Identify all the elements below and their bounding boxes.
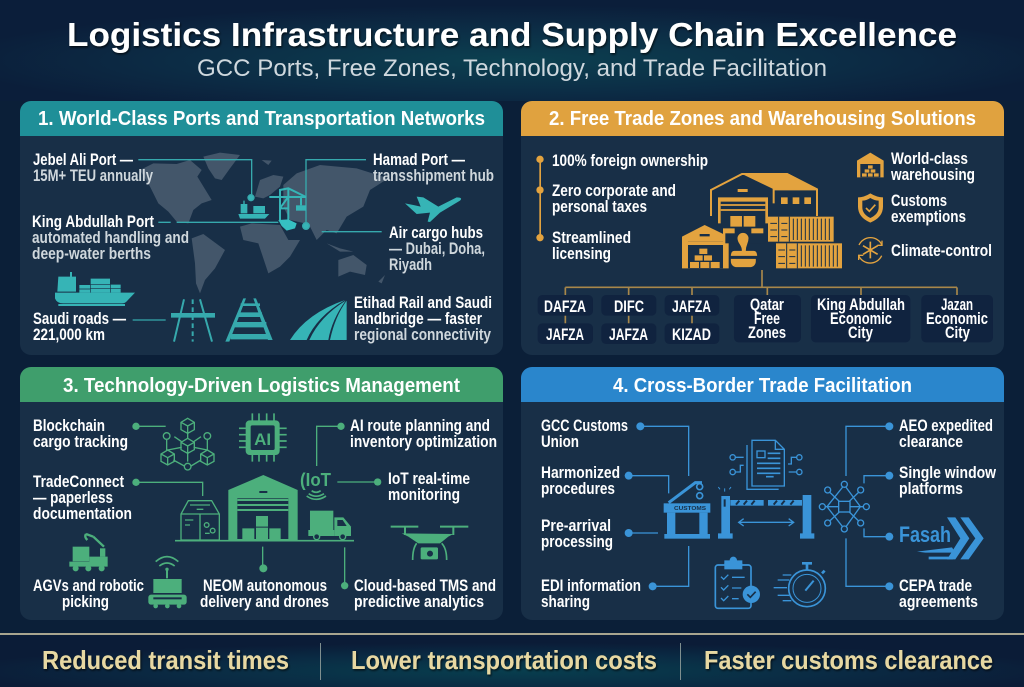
icon: central warehouse scene <box>175 475 354 541</box>
text: CEPA trade agreements <box>899 577 978 611</box>
text: TradeConnect <box>33 473 132 523</box>
text: AI route planning: AI route planning and <box>350 417 490 435</box>
icon: crate with documents <box>181 501 219 540</box>
text: Pre-arrival processing: processing <box>541 533 613 551</box>
text: Air cargo hubs <box>389 224 485 274</box>
icon: IoT signal: (IoT <box>300 470 331 490</box>
text: Cloud TMS: Cloud-based TMS and <box>354 577 496 595</box>
text: EDI information sharing <box>541 577 641 611</box>
icon: IoT signal <box>300 470 331 499</box>
bullet text: Zero corporate and <box>552 182 676 200</box>
text: Hamad Port <box>373 151 494 185</box>
text: TradeConnect: documentation <box>33 505 132 523</box>
text: Harmonized procedures <box>541 464 620 498</box>
text: Air cargo hubs: — Dubai, Doha, <box>389 240 485 258</box>
text: Jebel Ali Port: Jebel Ali Port — <box>33 151 133 169</box>
icon: AI chip <box>239 413 287 462</box>
text: Hamad Port: transshipment hub <box>373 167 494 185</box>
text: King Abdullah Port: automated handling and <box>32 229 189 247</box>
text: warehouse features: exemptions <box>891 208 966 226</box>
text: warehouse features: warehousing <box>890 166 975 184</box>
text: warehouse features: Customs <box>891 192 947 210</box>
text: IoT monitoring: IoT real-time <box>388 470 470 488</box>
text: NEOM: delivery and drones <box>200 593 329 611</box>
text: AEO expedited clearance: clearance <box>899 433 963 451</box>
zone tag names <box>544 296 988 344</box>
panel: technology logistics <box>20 367 503 620</box>
world map <box>140 153 388 293</box>
zone tag names: Qatar <box>750 296 784 314</box>
text: King Abdullah Port <box>32 213 189 263</box>
benefit: reduced transit times: Reduced transit times <box>42 645 289 675</box>
text: Cloud TMS <box>354 577 496 611</box>
text: blockchain <box>33 417 128 451</box>
text: TradeConnect: — paperless <box>33 489 113 507</box>
icon: robotic AGV <box>69 534 108 571</box>
icon: climate control <box>859 238 882 263</box>
icon: drone <box>391 527 468 560</box>
text: GCC Customs Union: GCC Customs <box>541 417 628 435</box>
text: GCC Customs Union <box>541 417 628 451</box>
panel 2 header: 2. Free Trade Zones and Warehousing Solutions <box>549 108 976 130</box>
icon: clipboard checklist <box>715 557 760 608</box>
icon: warehousing <box>857 153 884 177</box>
icon: stopwatch <box>774 563 825 607</box>
panel 4 header: 4. Cross-Border Trade Facilitation <box>613 375 912 397</box>
icon: port crane and ship <box>238 188 306 231</box>
text: AI route planning: inventory optimization <box>350 433 497 451</box>
icon: landbridge road <box>290 300 347 340</box>
text: EDI information sharing: EDI information <box>541 577 641 595</box>
zone tag names: City <box>848 324 874 342</box>
bullet text: Streamlined <box>552 229 631 247</box>
footer benefits bar <box>0 633 1024 680</box>
text: Etihad Rail: Etihad Rail and Saudi <box>354 294 492 312</box>
text: King Abdullah Port: King Abdullah Port <box>32 213 154 231</box>
panel 3 header <box>20 367 503 402</box>
zone tag names: Free <box>754 310 780 328</box>
zone tag names: DAFZA <box>544 298 586 316</box>
text: Single window platforms: Single window <box>899 464 996 482</box>
panel: cross-border trade <box>521 367 1004 620</box>
zone tag names: Jazan <box>941 296 973 314</box>
zone tag names: Economic <box>830 310 892 328</box>
text: Saudi roads: 221,000 km <box>33 326 105 344</box>
icon: customs building with crane: CUSTOMS <box>674 506 706 512</box>
text: blockchain: Blockchain <box>33 417 105 435</box>
zone tag boxes <box>538 295 993 344</box>
bullet text: licensing <box>552 245 611 263</box>
text: AGVs: picking <box>62 593 109 611</box>
bullet text: 100% foreign ownership <box>552 152 708 170</box>
text: AGVs: AGVs and robotic <box>33 577 144 595</box>
text: Jebel Ali Port: 15M+ TEU annually <box>33 167 154 185</box>
zone tag names: KIZAD <box>672 326 711 344</box>
text: Pre-arrival processing <box>541 517 613 551</box>
icon: delivery truck <box>308 511 351 536</box>
text: warehouse features: World-class <box>891 150 968 168</box>
text: Etihad Rail <box>354 294 492 344</box>
icon: digital document <box>730 440 802 489</box>
benefit: lower transportation costs: Lower transportation costs <box>351 645 657 675</box>
text: Air cargo hubs: Air cargo hubs <box>389 224 483 242</box>
text: Air cargo hubs: Riyadh <box>389 256 432 274</box>
text: AEO expedited clearance <box>899 417 993 451</box>
zone tag names: JAFZA <box>546 326 584 344</box>
zone tree connectors <box>565 270 957 323</box>
icon: highway <box>171 299 215 342</box>
icon: railway <box>225 298 273 342</box>
text: NEOM <box>200 577 329 611</box>
text: Jebel Ali Port <box>33 151 154 185</box>
text: TradeConnect: TradeConnect <box>33 473 124 491</box>
panel 3 header: 3. Technology-Driven Logistics Management <box>63 375 460 397</box>
icon: container ship <box>55 272 135 306</box>
text: Saudi roads <box>33 310 126 344</box>
zone tag names: Economic <box>926 310 988 328</box>
connector lines and port markers <box>133 160 382 320</box>
text: Etihad Rail: landbridge — faster <box>354 310 482 328</box>
text: Single window platforms: platforms <box>899 480 963 498</box>
panel 4 header <box>521 367 1004 402</box>
icon: shield <box>858 193 883 223</box>
logo: Fasah: Fasah <box>899 522 951 547</box>
text: Pre-arrival processing: Pre-arrival <box>541 517 611 535</box>
panel: ports and transportation <box>20 101 503 355</box>
text: CEPA trade agreements: CEPA trade <box>899 577 972 595</box>
text: IoT monitoring: monitoring <box>388 486 460 504</box>
icon: barrier gate <box>718 487 814 539</box>
text: AEO expedited clearance: AEO expedited <box>899 417 993 435</box>
text: GCC Customs Union: Union <box>541 433 579 451</box>
panel 1 header: 1. World-Class Ports and Transportation Networks <box>38 108 485 130</box>
text: warehouse features <box>890 150 992 260</box>
bullet text <box>552 152 708 263</box>
icon: warehouse, containers and stamp <box>682 174 842 268</box>
text: Etihad Rail: regional connectivity <box>354 326 492 344</box>
text: Saudi roads: Saudi roads — <box>33 310 126 328</box>
text: CEPA trade agreements: agreements <box>899 593 978 611</box>
text: IoT monitoring <box>388 470 470 504</box>
text: EDI information sharing: sharing <box>541 593 590 611</box>
connector lines and dots <box>625 422 893 590</box>
icon: connected network <box>819 481 869 532</box>
text: Single window platforms <box>899 464 996 498</box>
zone tag names: JAFZA <box>672 298 711 316</box>
text: King Abdullah Port: deep-water berths <box>32 245 151 263</box>
connector lines and dots <box>132 423 381 589</box>
icon: autonomous vehicle with wifi <box>148 557 187 608</box>
zone tag names: City <box>945 324 971 342</box>
panel 1 header <box>20 101 503 136</box>
icon: AI chip: AI <box>254 430 271 449</box>
benefit: faster customs clearance: Faster customs clearance <box>704 645 993 675</box>
icon: airplane <box>405 197 461 222</box>
bullet rail <box>536 156 544 241</box>
text: Harmonized procedures: Harmonized <box>541 464 620 482</box>
icon: customs building with crane <box>664 483 710 539</box>
zone tag names: King Abdullah <box>817 296 905 314</box>
logo: Fasah <box>899 517 984 559</box>
panel: free trade zones <box>521 101 1004 355</box>
text: Cloud TMS: predictive analytics <box>354 593 484 611</box>
text: Hamad Port: Hamad Port — <box>373 151 465 169</box>
panel 2 header <box>521 101 1004 136</box>
text: blockchain: cargo tracking <box>33 433 128 451</box>
zone tag names: DIFC <box>614 298 644 316</box>
text: NEOM: NEOM autonomous <box>203 577 327 595</box>
icon: blockchain network <box>161 418 214 470</box>
title: Logistics Infrastructure and Supply Chain Excellence <box>67 16 957 53</box>
zone tag names: Zones <box>748 324 786 342</box>
text: Harmonized procedures: procedures <box>541 480 615 498</box>
text: AGVs <box>33 577 144 611</box>
text: warehouse features: Climate-control <box>891 242 992 260</box>
zone tag names: JAFZA <box>609 326 648 344</box>
text: AI route planning <box>350 417 497 451</box>
subtitle: GCC Ports, Free Zones, Technology, and Trade Facilitation <box>197 55 827 82</box>
bullet text: personal taxes <box>552 198 647 216</box>
